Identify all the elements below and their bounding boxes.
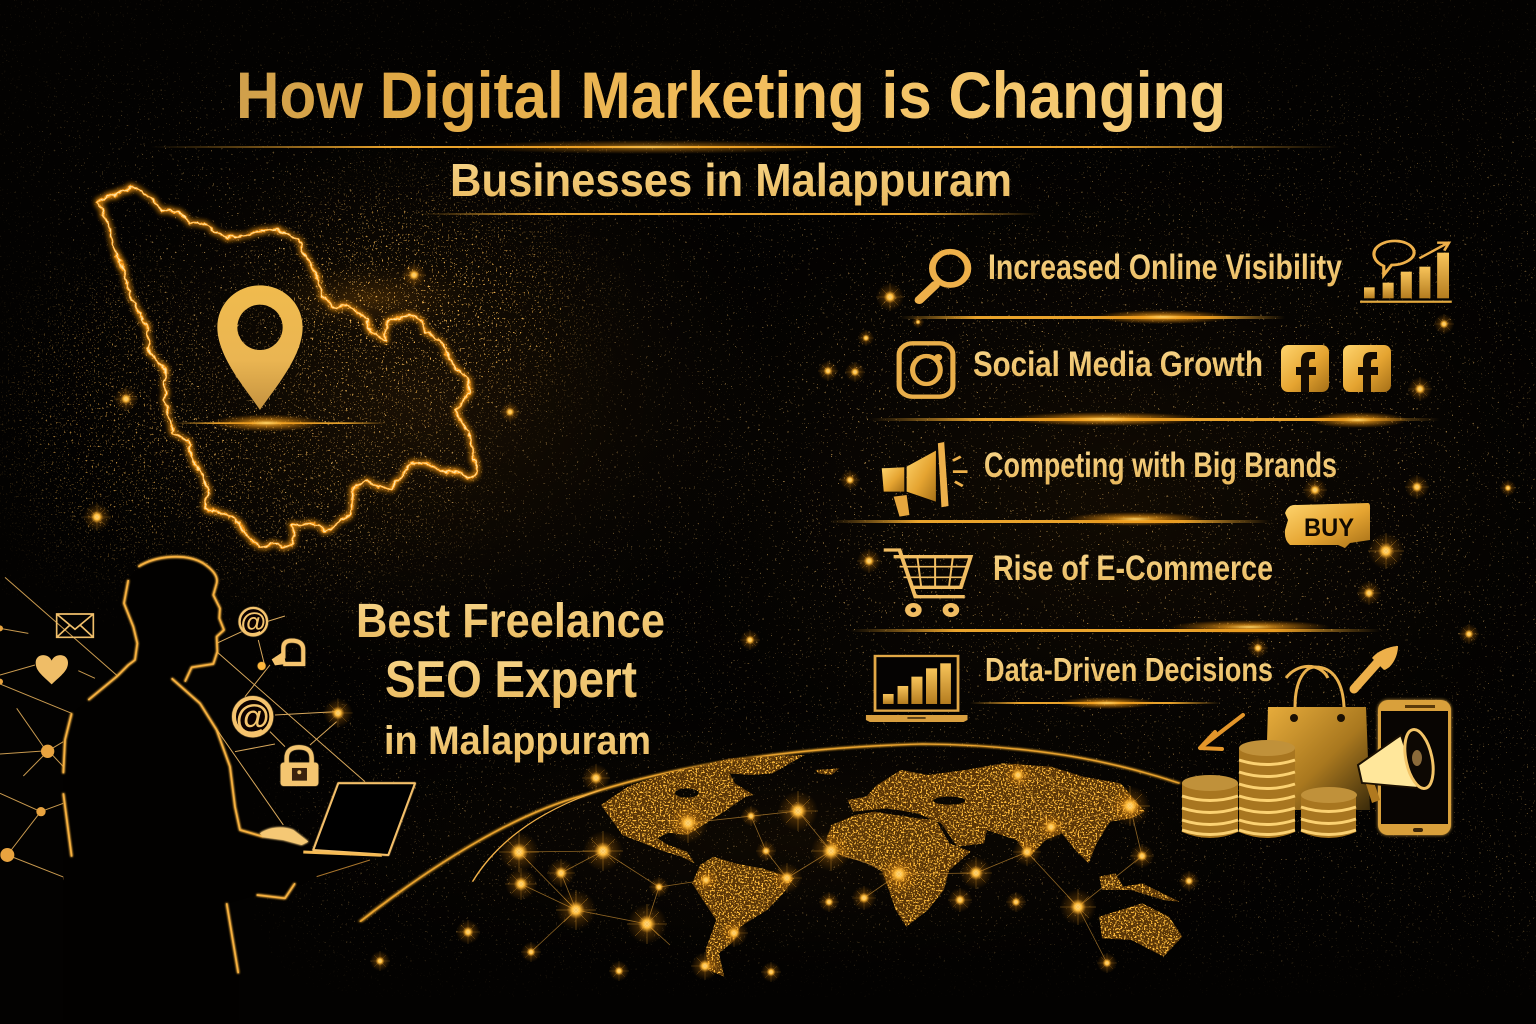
- title: How Digital Marketing is Changing: [236, 58, 1226, 132]
- item: increased online visibility: Increased Online Visibility: [988, 248, 1342, 287]
- icon: heart: [36, 655, 68, 684]
- icon: laptop chart: [866, 656, 968, 722]
- tagline: SEO Expert: [385, 651, 637, 709]
- icon: at sign large: @: [236, 699, 270, 737]
- item: competing with big brands: Competing with Big Brands: [984, 446, 1337, 485]
- icon: buy tag: [1285, 503, 1370, 548]
- item: competing with big brands: [830, 442, 1337, 526]
- hands: [260, 827, 308, 845]
- icon: key: [1354, 646, 1398, 689]
- e-commerce cluster: [1182, 646, 1451, 838]
- tagline: in Malappuram: [384, 719, 651, 763]
- icon: smartphone: [1378, 700, 1451, 835]
- map of Malappuram district: [83, 187, 520, 548]
- item: rise of e-commerce: [850, 503, 1380, 634]
- map outline core: [97, 187, 477, 548]
- icon: phone megaphone: [1358, 727, 1438, 803]
- icon: shopping cart: [884, 550, 971, 615]
- title: Businesses in Malappuram: [450, 154, 1012, 206]
- world map globe: [360, 744, 1199, 982]
- item: social media growth: Social Media Growth: [973, 345, 1263, 384]
- network lines: [0, 577, 365, 878]
- tagline: [356, 595, 665, 763]
- icon: chat tail: [272, 652, 286, 665]
- icon: megaphone: [882, 442, 968, 517]
- silhouette: [63, 557, 370, 1020]
- icon: shopping bag: [1265, 666, 1370, 810]
- icon: at sign small: @: [241, 607, 266, 637]
- icon: magnifier: [919, 252, 968, 300]
- continents: [601, 755, 1182, 977]
- silhouette outline: [63, 557, 295, 973]
- item: rise of e-commerce: Rise of E-Commerce: [993, 549, 1273, 588]
- icon: instagram: [899, 343, 953, 397]
- sparkle node: [323, 698, 353, 728]
- inner arc: [472, 790, 601, 882]
- title: [150, 58, 1340, 215]
- city lights: [370, 761, 1199, 982]
- icon: chat bubble: [283, 641, 303, 664]
- icon: arrow: [1200, 715, 1243, 749]
- person with laptop and network: [0, 557, 415, 1020]
- icon: growth chart: [1360, 241, 1452, 303]
- icon: coin stack tall: [1239, 740, 1295, 838]
- globe limb: [360, 744, 1180, 922]
- icon: coin stack: [1182, 775, 1238, 838]
- title divider: [150, 140, 1340, 154]
- list of benefits: [830, 241, 1452, 722]
- connection lines: [519, 775, 1142, 963]
- icon: facebook badges: [1281, 345, 1391, 392]
- item: increased online visibility: [900, 241, 1452, 324]
- scattered sparkles: [740, 283, 1516, 658]
- icon: padlock: [281, 747, 318, 786]
- item: data-driven decisions: Data-Driven Decisions: [985, 651, 1273, 688]
- icon: coin stack short: [1301, 787, 1357, 838]
- location pin: [217, 285, 303, 410]
- network nodes: [0, 625, 71, 882]
- tagline: Best Freelance: [356, 595, 665, 648]
- network dot: [258, 662, 266, 670]
- laptop: [303, 783, 415, 877]
- pin ground flare: [173, 414, 387, 432]
- icon: buy tag: BUY: [1304, 514, 1354, 542]
- item: social media growth: [870, 343, 1440, 428]
- item: data-driven decisions: [866, 651, 1273, 722]
- icon: envelope: [57, 614, 93, 637]
